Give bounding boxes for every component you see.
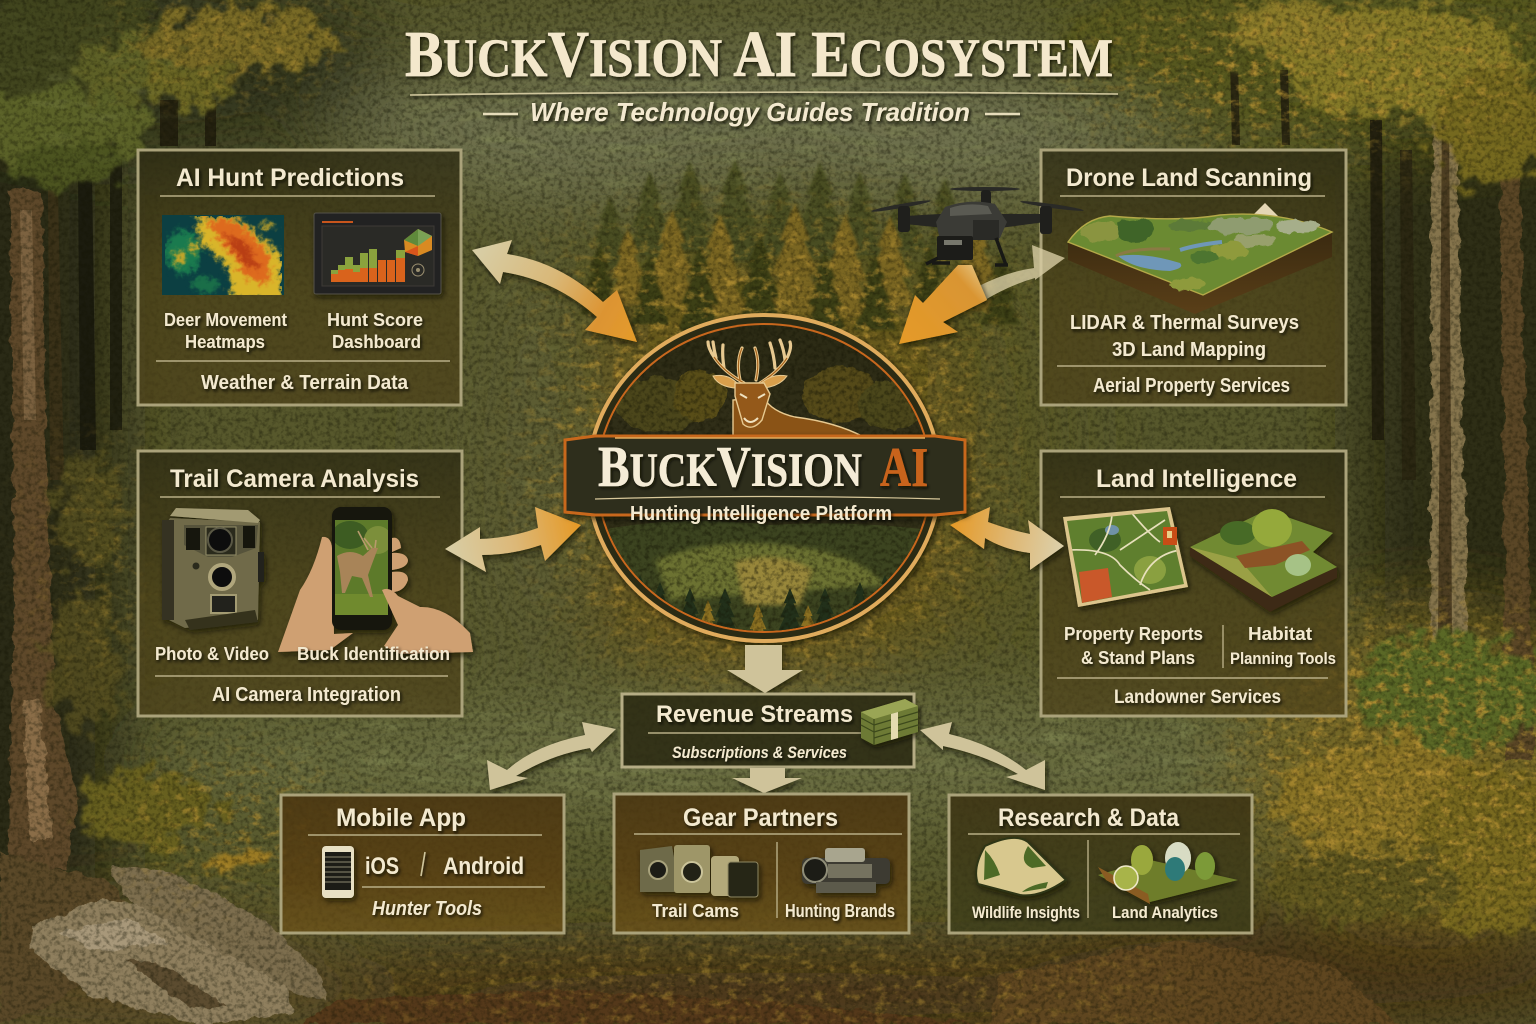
footer: Aerial Property Services: Aerial Property Services bbox=[1093, 375, 1290, 397]
labels: iOS and Android bbox=[365, 852, 524, 880]
icon: trail cams bbox=[640, 845, 758, 897]
labels: heatmap and dashboard: Deer Movement bbox=[164, 310, 287, 330]
icon: land analytics bbox=[1098, 842, 1238, 904]
panel: Trail Camera Analysis bbox=[138, 451, 473, 716]
arrow: drone to land block bbox=[975, 245, 1065, 300]
labels: photo video and buck id bbox=[155, 644, 450, 664]
icon: deer head and antlers bbox=[708, 340, 864, 437]
icon: cash stack bbox=[861, 699, 918, 745]
labels: trail cams and hunting brands: Trail Cams bbox=[652, 901, 739, 921]
panel: Mobile App bbox=[281, 795, 564, 933]
heading: Mobile App: Mobile App bbox=[336, 804, 466, 832]
heading: Drone Land Scanning: Drone Land Scanning bbox=[1066, 164, 1312, 192]
illustration: 3D land block bbox=[1068, 203, 1332, 314]
icon: wildlife map bbox=[976, 838, 1066, 895]
labels: trail cams and hunting brands bbox=[652, 901, 895, 921]
arrow: land intelligence to center bbox=[950, 507, 1064, 570]
arrow: AI Hunt Predictions to center bbox=[472, 240, 637, 342]
labels: wildlife insights and land analytics: Land Analytics bbox=[1112, 903, 1218, 922]
badge: BuckVision AI hub bbox=[565, 313, 965, 645]
labels: heatmap and dashboard bbox=[164, 310, 423, 352]
body text: LIDAR and 3D mapping bbox=[1070, 312, 1299, 361]
footer: Hunter Tools: Hunter Tools bbox=[372, 898, 482, 920]
icon: smartphone bbox=[322, 846, 354, 898]
icon: property map bbox=[1060, 505, 1190, 610]
footer: Weather & Terrain Data: Weather & Terrain Data bbox=[201, 372, 409, 394]
labels: wildlife insights and land analytics bbox=[972, 903, 1218, 922]
body text: LIDAR and 3D mapping: LIDAR & Thermal Surveys bbox=[1070, 312, 1299, 334]
badge name: BUCKVISION bbox=[598, 434, 862, 499]
heading: Gear Partners: Gear Partners bbox=[683, 804, 838, 832]
chart: hunt score dashboard bbox=[314, 213, 441, 294]
banner bbox=[565, 436, 965, 515]
footer: AI Camera Integration: AI Camera Integration bbox=[212, 684, 401, 706]
labels: reports and habitat tools bbox=[1064, 624, 1336, 668]
panel: Research & Data bbox=[949, 795, 1252, 933]
footer: Landowner Services: Landowner Services bbox=[1114, 687, 1281, 708]
labels: photo video and buck id: Photo & Video bbox=[155, 644, 269, 664]
labels: heatmap and dashboard: Hunt Score bbox=[327, 310, 423, 330]
panel: Land Intelligence bbox=[1041, 451, 1346, 716]
subheading: Subscriptions and Services: Subscriptions & Services bbox=[672, 743, 847, 762]
badge tagline: Hunting Intelligence Platform bbox=[630, 503, 892, 525]
labels: heatmap and dashboard: Heatmaps bbox=[185, 332, 265, 352]
arrow: drone down to center bbox=[899, 265, 987, 344]
subtitle: Where Technology Guides Tradition bbox=[530, 97, 970, 127]
heading: Revenue Streams: Revenue Streams bbox=[656, 701, 853, 728]
labels: reports and habitat tools: Habitat bbox=[1248, 624, 1312, 644]
labels: heatmap and dashboard: Dashboard bbox=[332, 332, 421, 352]
heading: AI Hunt Predictions: AI Hunt Predictions bbox=[176, 164, 404, 192]
body text: LIDAR and 3D mapping: 3D Land Mapping bbox=[1112, 339, 1266, 361]
labels: iOS and Android: iOS bbox=[365, 853, 399, 880]
icon: habitat plot bbox=[1190, 509, 1337, 612]
panel: Gear Partners bbox=[614, 794, 909, 933]
icon: phone showing buck bbox=[278, 507, 473, 654]
panel: AI Hunt Predictions bbox=[138, 150, 461, 405]
heading: Trail Camera Analysis: Trail Camera Analysis bbox=[170, 465, 419, 493]
arrow: revenue to research bbox=[920, 722, 1045, 790]
forest scene inside badge bbox=[604, 325, 924, 631]
icon: hunting brands gear bbox=[802, 848, 890, 893]
chart: deer movement heatmap bbox=[162, 215, 284, 300]
panel: Drone Land Scanning bbox=[1041, 150, 1346, 405]
panel: Revenue Streams bbox=[622, 694, 918, 767]
badge name: AI bbox=[880, 437, 928, 499]
tree trunks bbox=[8, 60, 1534, 870]
drone bbox=[871, 187, 1084, 265]
heading: Land Intelligence: Land Intelligence bbox=[1096, 465, 1297, 493]
rocks and ground bbox=[0, 850, 1400, 1024]
labels: reports and habitat tools: & Stand Plans bbox=[1081, 648, 1195, 668]
labels: iOS and Android: Android bbox=[443, 853, 524, 880]
arrow: revenue to gear partners bbox=[732, 768, 802, 793]
labels: photo video and buck id: Buck Identification bbox=[297, 644, 450, 664]
arrow: revenue to mobile app bbox=[487, 722, 616, 790]
icon: trail camera bbox=[162, 508, 264, 630]
labels: reports and habitat tools: Planning Tools bbox=[1230, 649, 1336, 668]
labels: reports and habitat tools: Property Reports bbox=[1064, 624, 1203, 644]
arrow: trail camera to center bbox=[445, 507, 581, 572]
labels: trail cams and hunting brands: Hunting Brands bbox=[785, 901, 895, 921]
title: BUCKVISION AI ECOSYSTEM bbox=[405, 18, 1113, 91]
center pine forest bbox=[580, 159, 1020, 336]
heading: Research & Data: Research & Data bbox=[998, 804, 1180, 832]
labels: wildlife insights and land analytics: Wildlife Insights bbox=[972, 903, 1080, 922]
arrow: hub down to revenue bbox=[727, 645, 803, 693]
